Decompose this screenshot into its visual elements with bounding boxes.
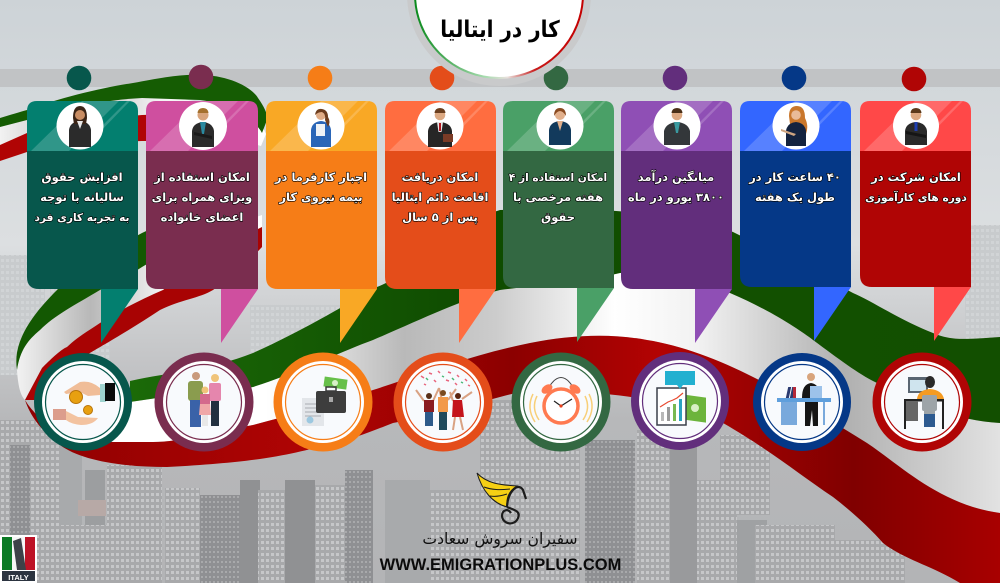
top timeline dots — [67, 65, 926, 91]
card 3: employer insurance: بیمه نیروی کار — [278, 190, 363, 205]
logo: golden wing and S emblem — [477, 473, 526, 523]
title text: کار در ایتالیا — [440, 17, 560, 43]
top grey bar — [0, 69, 1000, 87]
card 8: internship courses: دوره های کارآموزی — [865, 190, 967, 204]
card 4: permanent residency: امکان دریافت — [402, 170, 478, 184]
ribbon: upper-left fold — [0, 75, 267, 161]
ribbon: descending left band — [16, 195, 262, 400]
icon circle 8: person at computer — [872, 352, 972, 452]
avatar 8: man with crossed arms — [893, 103, 939, 149]
card 8: internship courses: امکان شرکت در — [870, 170, 961, 184]
icon circle 4: celebrating people — [394, 352, 492, 452]
italy badge — [0, 535, 37, 583]
icon circle 2: family — [154, 352, 254, 452]
card 5: four weeks paid leave: هفته مرخصی با — [513, 190, 603, 204]
avatar 3: woman with papers — [298, 102, 344, 150]
icon circle 7: man at office desk — [753, 353, 851, 451]
card 7: forty hours a week: طول یک هفته — [755, 190, 835, 205]
logo: website address: WWW.EMIGRATIONPLUS.COM — [380, 556, 621, 574]
card 6: average income — [621, 101, 732, 343]
card 4: permanent residency: پس از ۵ سال — [402, 210, 478, 224]
avatar 6: man in grey suit — [654, 102, 700, 150]
title badge — [407, 0, 591, 86]
card 7: forty hours a week — [740, 101, 851, 341]
avatar 7: woman with long hair — [772, 102, 820, 150]
card 5: four weeks paid leave — [503, 101, 614, 342]
ribbon: main green stripe — [130, 209, 1000, 423]
card 2: visa for family: امکان استفاده از — [153, 170, 250, 184]
icon circle 1: hands with coins — [34, 353, 132, 451]
icon circle 5: alarm clock — [512, 352, 610, 452]
icon circle 3: briefcase, money and contract — [274, 352, 372, 452]
card 6: average income: ۳۸۰۰ یورو در ماه — [628, 190, 724, 205]
card 2: visa for family: ویزای همراه برای — [152, 190, 252, 205]
card 1: salary increase: افزایش حقوق — [41, 170, 123, 185]
badge label: ITALY — [8, 573, 29, 582]
card 3: employer insurance: اجبار کارفرما در — [274, 170, 367, 184]
avatar 2: man with glasses — [179, 102, 227, 150]
card 5: four weeks paid leave: حقوق — [541, 210, 575, 225]
avatar 4: man with red tie — [416, 102, 464, 150]
card 1: salary increase: به تجربه کاری فرد — [35, 212, 130, 224]
card 4: permanent residency — [385, 101, 496, 343]
card 8: internship courses — [860, 101, 971, 341]
card 4: permanent residency: اقامت دائم ایتالیا — [392, 190, 488, 204]
card 1: salary increase: سالیانه با توجه — [40, 190, 124, 205]
company logo — [380, 473, 621, 574]
card 7: forty hours a week: ۴۰ ساعت کار در — [748, 170, 841, 184]
icon circle 6: chart and money — [631, 352, 729, 450]
card 6: average income: میانگین درآمد — [638, 170, 714, 184]
card 5: four weeks paid leave: امکان استفاده از ۴ — [509, 172, 607, 184]
ribbon: main white stripe — [83, 272, 1000, 513]
card 1: salary increase — [27, 101, 138, 343]
logo: persian company name: سفیران سروش سعادت — [422, 530, 578, 549]
card 2: visa for family — [146, 101, 258, 343]
card 3: employer insurance — [266, 101, 377, 343]
card 2: visa for family: اعضای خانواده — [161, 210, 243, 225]
avatar 5: woman in navy — [536, 102, 584, 150]
avatar 1: woman — [56, 102, 104, 150]
ribbon: main red stripe — [25, 336, 1000, 583]
